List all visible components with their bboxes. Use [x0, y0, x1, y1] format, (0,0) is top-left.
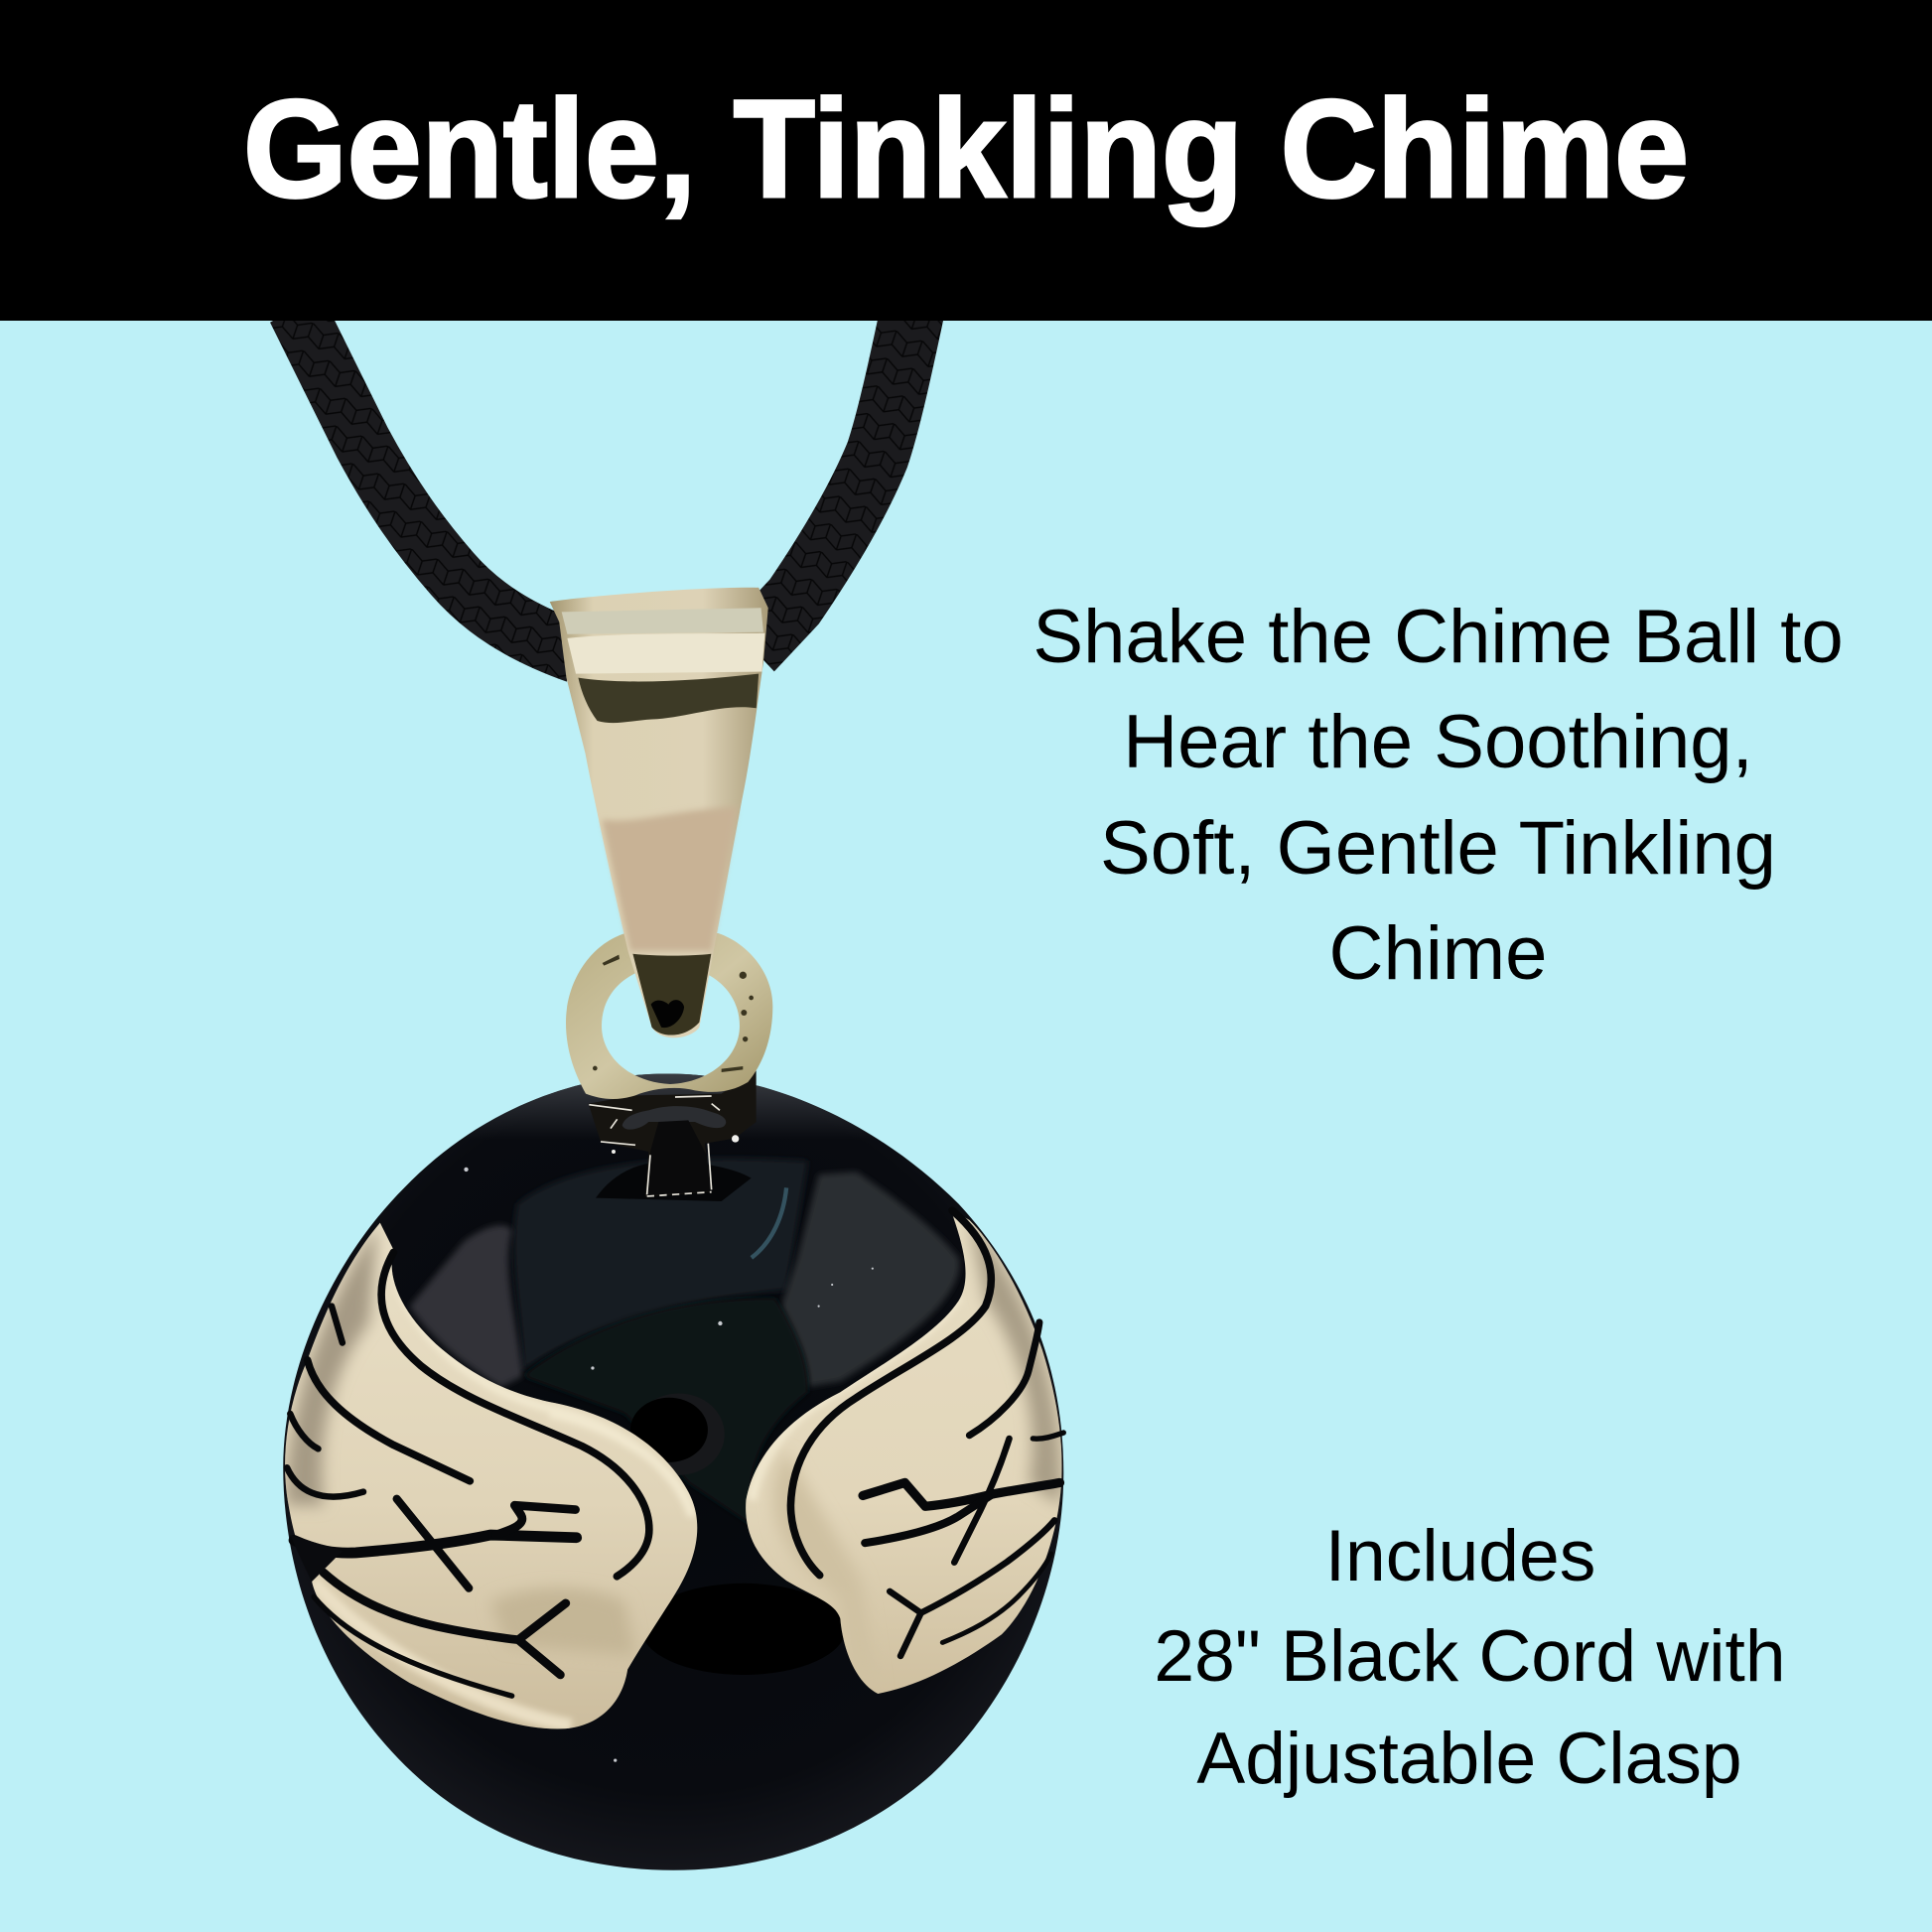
cap glints: [589, 1096, 720, 1196]
cord: left strand: [296, 308, 576, 652]
bail body: [550, 588, 768, 1037]
ball body: [283, 1073, 1063, 1870]
bail dark tip: [632, 954, 711, 1035]
title: Gentle, Tinkling Chime: [243, 70, 1689, 226]
text block: includes cord: Includes: [1325, 1515, 1595, 1596]
text block: includes cord: [1154, 1515, 1786, 1799]
bail: [550, 588, 768, 1037]
cap base: [589, 1070, 757, 1196]
ball reflections: [355, 1069, 1002, 1675]
ring specks: [593, 955, 754, 1072]
bail lower tone: [602, 807, 738, 951]
cord: right strand: [752, 308, 913, 647]
left wing: engraved lines: [287, 1252, 649, 1696]
left wing: [285, 1223, 697, 1728]
text block: shake description: [1033, 595, 1844, 996]
bail dark reflection: [578, 674, 759, 723]
ball socket: [596, 1162, 752, 1201]
ring and cap: [566, 933, 772, 1201]
cap club highlight: [622, 1106, 726, 1130]
header band: [0, 0, 1932, 321]
text block: shake description: Soft, Gentle Tinkling: [1100, 806, 1776, 891]
text block: shake description: Shake the Chime Ball to: [1033, 595, 1844, 679]
bail top band: [562, 608, 763, 634]
hole: [633, 1393, 725, 1475]
jump ring: [566, 933, 772, 1099]
text block: shake description: Hear the Soothing,: [1123, 700, 1753, 784]
specks on ball: [464, 1168, 874, 1762]
chime ball: [283, 1069, 1063, 1870]
bail tip hole: [651, 1000, 684, 1028]
text block: includes cord: 28" Black Cord with: [1154, 1615, 1786, 1697]
bail highlight: [567, 633, 764, 674]
right wing: engraved lines: [790, 1210, 1063, 1656]
left wing gap: [290, 1535, 343, 1582]
cap slot: [647, 1120, 712, 1195]
black cord: [296, 308, 913, 652]
text block: shake description: Chime: [1329, 911, 1547, 996]
right wing: [746, 1209, 1063, 1694]
hole centre: [630, 1398, 708, 1462]
text block: includes cord: Adjustable Clasp: [1196, 1718, 1742, 1799]
